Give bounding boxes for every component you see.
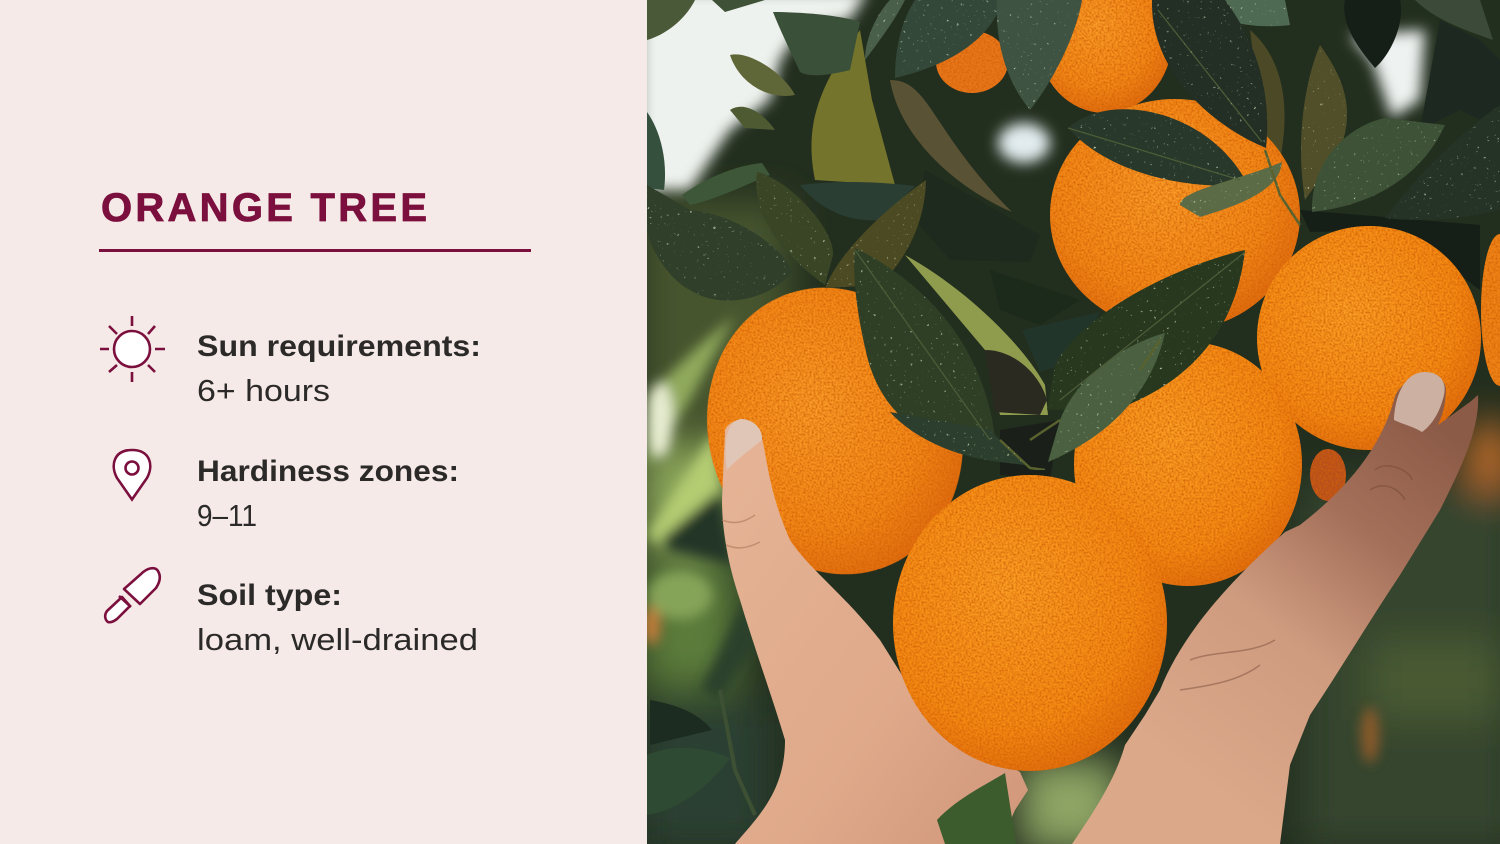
back leaves: [647, 0, 1500, 815]
text: sun requirements: Sun requirements:: [197, 330, 481, 363]
icon: trowel: [105, 568, 160, 622]
icon: left thumbnail: [726, 419, 762, 470]
orange: front centre: [893, 475, 1167, 771]
text: soil type: [197, 579, 478, 657]
icon: location pin: [114, 450, 150, 500]
blurred background foliage and sky: [640, 0, 1500, 844]
text: hardiness zones: [197, 455, 459, 533]
icon: right thumbnail: [1394, 372, 1445, 432]
text: sun requirements: 6+ hours: [197, 373, 330, 408]
text: soil type: Soil type:: [197, 579, 342, 612]
leaf: bottom foreground: [937, 773, 1016, 844]
hand: right: [1072, 372, 1478, 844]
text: soil type: loam, well-drained: [197, 622, 478, 657]
leaves over the oranges: [647, 0, 1500, 470]
title: ORANGE TREE: [101, 186, 427, 230]
photo: hands holding oranges on the tree: [647, 0, 1500, 844]
hand: left: [722, 419, 1028, 844]
oranges behind the leaves: [670, 0, 1500, 608]
text: hardiness zones: Hardiness zones:: [197, 455, 459, 488]
text: hardiness zones: 9–11: [197, 498, 257, 533]
text: sun requirements: [197, 330, 481, 408]
icon: sun: [100, 316, 165, 382]
panel: plant information: [0, 0, 647, 844]
